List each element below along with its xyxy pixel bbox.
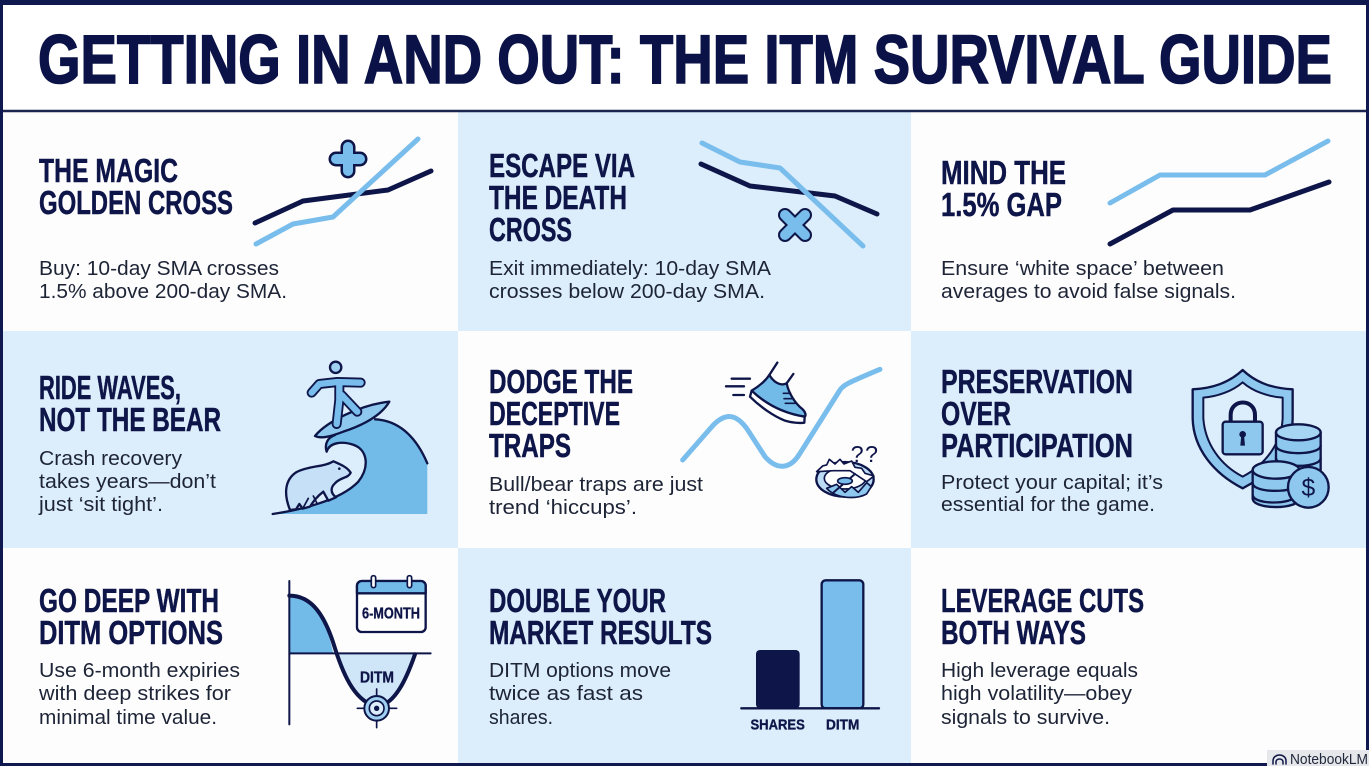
icon: sneaker stepping over bear trap on a price line: ? bbox=[865, 441, 878, 467]
text: white space rule bbox=[941, 257, 1236, 303]
chart: golden cross lines with plus icon bbox=[255, 139, 431, 244]
panel: double your market results bbox=[458, 548, 911, 766]
text: protect capital: essential for the game. bbox=[941, 493, 1155, 516]
chart: shares vs ditm bars: SHARES bbox=[750, 717, 805, 733]
heading: double results: DOUBLE YOUR bbox=[489, 582, 666, 619]
text: golden cross rule: 1.5% above 200-day SMA. bbox=[39, 280, 287, 303]
panel: the magic golden cross bbox=[0, 112, 458, 331]
heading: mind the gap: MIND THE bbox=[941, 154, 1066, 191]
text: six-month expiries: Use 6-month expiries bbox=[39, 659, 240, 682]
heading: preservation: PRESERVATION bbox=[941, 363, 1133, 400]
heading: escape via the death cross: CROSS bbox=[489, 211, 572, 248]
heading: leverage bbox=[941, 582, 1144, 651]
panel: leverage cuts both ways bbox=[911, 548, 1369, 766]
heading: the magic golden cross bbox=[39, 152, 233, 221]
title bbox=[0, 0, 1369, 111]
watermark: NotebookLM bbox=[1267, 750, 1369, 766]
text: six-month expiries: with deep strikes for bbox=[38, 682, 231, 705]
chart: payoff curve with calendar and target bbox=[289, 576, 431, 728]
heading: preservation: PARTICIPATION bbox=[941, 427, 1133, 464]
heading: escape via the death cross: THE DEATH bbox=[489, 179, 627, 216]
text: death cross rule bbox=[489, 257, 771, 303]
panel: preservation over participation bbox=[911, 331, 1369, 548]
text: ditm speed: shares. bbox=[489, 706, 553, 729]
heading: dodge traps: TRAPS bbox=[489, 427, 571, 464]
panel: mind the 1.5% gap bbox=[911, 112, 1369, 331]
icon: shield, lock and coin stacks: $ bbox=[1301, 475, 1315, 502]
heading: ride waves: RIDE WAVES, bbox=[39, 369, 181, 406]
text: ditm speed: twice as fast as bbox=[489, 682, 643, 705]
chart: shares vs ditm bars bbox=[741, 580, 879, 733]
heading: dodge traps: DECEPTIVE bbox=[489, 395, 620, 432]
heading: the magic golden cross: GOLDEN CROSS bbox=[39, 184, 233, 221]
text: six-month expiries bbox=[38, 659, 240, 729]
text: leverage warning bbox=[941, 659, 1138, 729]
text: protect capital bbox=[941, 471, 1163, 516]
heading: mind the gap bbox=[941, 154, 1066, 223]
heading: double results bbox=[489, 582, 712, 651]
text: ditm speed bbox=[489, 659, 671, 729]
panel: dodge the deceptive traps bbox=[458, 331, 911, 548]
heading: the magic golden cross: THE MAGIC bbox=[39, 152, 178, 189]
heading: leverage: LEVERAGE CUTS bbox=[941, 582, 1144, 619]
text: white space rule: Ensure ‘white space’ between bbox=[941, 257, 1224, 280]
text: leverage warning: high volatility—obey bbox=[941, 682, 1133, 705]
heading: preservation: OVER bbox=[941, 395, 1011, 432]
chart: payoff curve with calendar and target: DITM bbox=[360, 669, 394, 686]
text: bull/bear traps: Bull/bear traps are just bbox=[489, 473, 703, 496]
text: crash recovery bbox=[38, 447, 216, 516]
icon: six-month calendar: 6-MONTH bbox=[362, 605, 420, 622]
text: white space rule: averages to avoid false signals. bbox=[941, 280, 1236, 303]
heading: go deep bbox=[39, 582, 223, 651]
text: death cross rule: Exit immediately: 10-day SMA bbox=[489, 257, 771, 280]
icon: sneaker stepping over bear trap on a price line bbox=[683, 363, 880, 497]
heading: escape via the death cross: ESCAPE VIA bbox=[489, 147, 635, 184]
text: crash recovery: just ‘sit tight’. bbox=[38, 493, 163, 516]
heading: dodge traps: DODGE THE bbox=[489, 363, 633, 400]
panel: escape via the death cross bbox=[458, 112, 911, 331]
heading: escape via the death cross bbox=[489, 147, 635, 248]
icon: six-month calendar bbox=[357, 576, 426, 632]
heading: ride waves bbox=[39, 369, 221, 438]
chart: parallel moving averages bbox=[1110, 141, 1329, 244]
text: leverage warning: signals to survive. bbox=[941, 706, 1110, 729]
icon: sneaker stepping over bear trap on a price line: ? bbox=[851, 441, 864, 467]
heading: double results: MARKET RESULTS bbox=[489, 614, 712, 651]
heading: go deep: DITM OPTIONS bbox=[39, 614, 223, 651]
heading: preservation bbox=[941, 363, 1133, 464]
text: bull/bear traps bbox=[489, 473, 703, 519]
icon: surfer on wave above bear bbox=[273, 362, 427, 514]
text: protect capital: Protect your capital; it’s bbox=[941, 471, 1163, 494]
heading: go deep: GO DEEP WITH bbox=[39, 582, 219, 619]
heading: ride waves: NOT THE BEAR bbox=[39, 401, 221, 438]
text: golden cross rule bbox=[39, 257, 287, 303]
chart: death cross lines with x icon bbox=[701, 143, 877, 246]
text: six-month expiries: minimal time value. bbox=[39, 706, 217, 729]
chart: shares vs ditm bars: DITM bbox=[826, 717, 859, 733]
panel: go deep with ditm options bbox=[0, 548, 458, 766]
text: bull/bear traps: trend ‘hiccups’. bbox=[489, 496, 637, 519]
text: ditm speed: DITM options move bbox=[489, 659, 671, 682]
icon: shield, lock and coin stacks bbox=[1193, 370, 1329, 508]
text: leverage warning: High leverage equals bbox=[941, 659, 1138, 682]
text: death cross rule: crosses below 200-day SMA. bbox=[489, 280, 765, 303]
panel: ride waves, not the bear bbox=[0, 331, 458, 548]
heading: dodge traps bbox=[489, 363, 633, 464]
heading: mind the gap: 1.5% GAP bbox=[941, 186, 1062, 223]
heading: leverage: BOTH WAYS bbox=[941, 614, 1086, 651]
text: golden cross rule: Buy: 10-day SMA crosses bbox=[39, 257, 279, 280]
text: crash recovery: takes years—don’t bbox=[39, 470, 216, 493]
text: crash recovery: Crash recovery bbox=[39, 447, 183, 470]
